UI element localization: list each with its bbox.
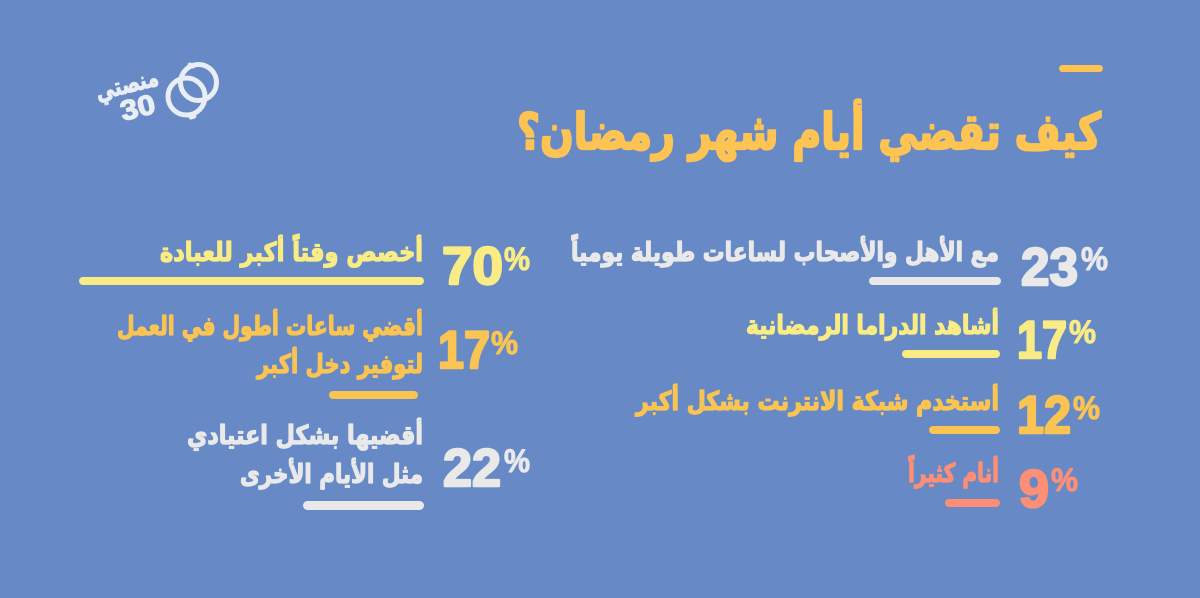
percent sign: % bbox=[1073, 390, 1100, 426]
bar bbox=[945, 499, 1000, 507]
value: 17 bbox=[438, 321, 490, 380]
icon: interlocking rings bbox=[168, 64, 216, 117]
row: 17 percent work bbox=[117, 309, 518, 399]
label line two: لتوفير دخل أكبر bbox=[255, 347, 423, 380]
percent sign: % bbox=[491, 325, 518, 361]
bar bbox=[79, 277, 424, 285]
value: 70 bbox=[442, 237, 503, 296]
panel: left column bbox=[79, 233, 530, 510]
title accent bar bbox=[1059, 65, 1103, 72]
bar bbox=[329, 391, 418, 399]
logo wordmark: منصتي bbox=[92, 63, 161, 106]
bar bbox=[902, 350, 1000, 358]
label line two: مثل الأيام الأخرى bbox=[240, 458, 423, 490]
row: 9 percent sleep bbox=[908, 454, 1078, 519]
label: أنام كثيراً bbox=[908, 454, 999, 489]
label: أستخدم شبكة الانترنت بشكل أكبر bbox=[634, 384, 999, 417]
percent sign: % bbox=[1069, 314, 1096, 350]
logo bbox=[92, 63, 216, 127]
bar bbox=[303, 501, 424, 510]
label line one: أقضي ساعات أطول في العمل bbox=[117, 309, 423, 342]
row: 23 percent family bbox=[571, 233, 1108, 297]
percent sign: % bbox=[504, 241, 530, 277]
bar bbox=[869, 277, 1001, 285]
logo number: 30 bbox=[117, 88, 158, 127]
percent sign: % bbox=[1081, 241, 1108, 277]
value: 23 bbox=[1021, 238, 1078, 297]
label: أشاهد الدراما الرمضانية bbox=[746, 308, 999, 341]
row: 70 percent worship bbox=[79, 233, 530, 296]
row: 17 percent drama bbox=[746, 308, 1096, 370]
value: 22 bbox=[443, 439, 501, 498]
label: مع الأهل والأصحاب لساعات طويلة يومياً bbox=[571, 233, 999, 268]
value: 17 bbox=[1017, 311, 1067, 370]
bar bbox=[929, 426, 1000, 434]
label: أخصص وقتاً أكبر للعبادة bbox=[160, 233, 423, 268]
panel: right column bbox=[571, 233, 1108, 519]
value: 9 bbox=[1019, 460, 1049, 519]
percent sign: % bbox=[1051, 462, 1078, 498]
value: 12 bbox=[1017, 386, 1071, 445]
percent sign: % bbox=[504, 443, 530, 479]
row: 12 percent internet bbox=[634, 384, 1100, 445]
row: 22 percent usual bbox=[187, 418, 530, 510]
label line one: أقضيها بشكل اعتيادي bbox=[187, 418, 423, 451]
